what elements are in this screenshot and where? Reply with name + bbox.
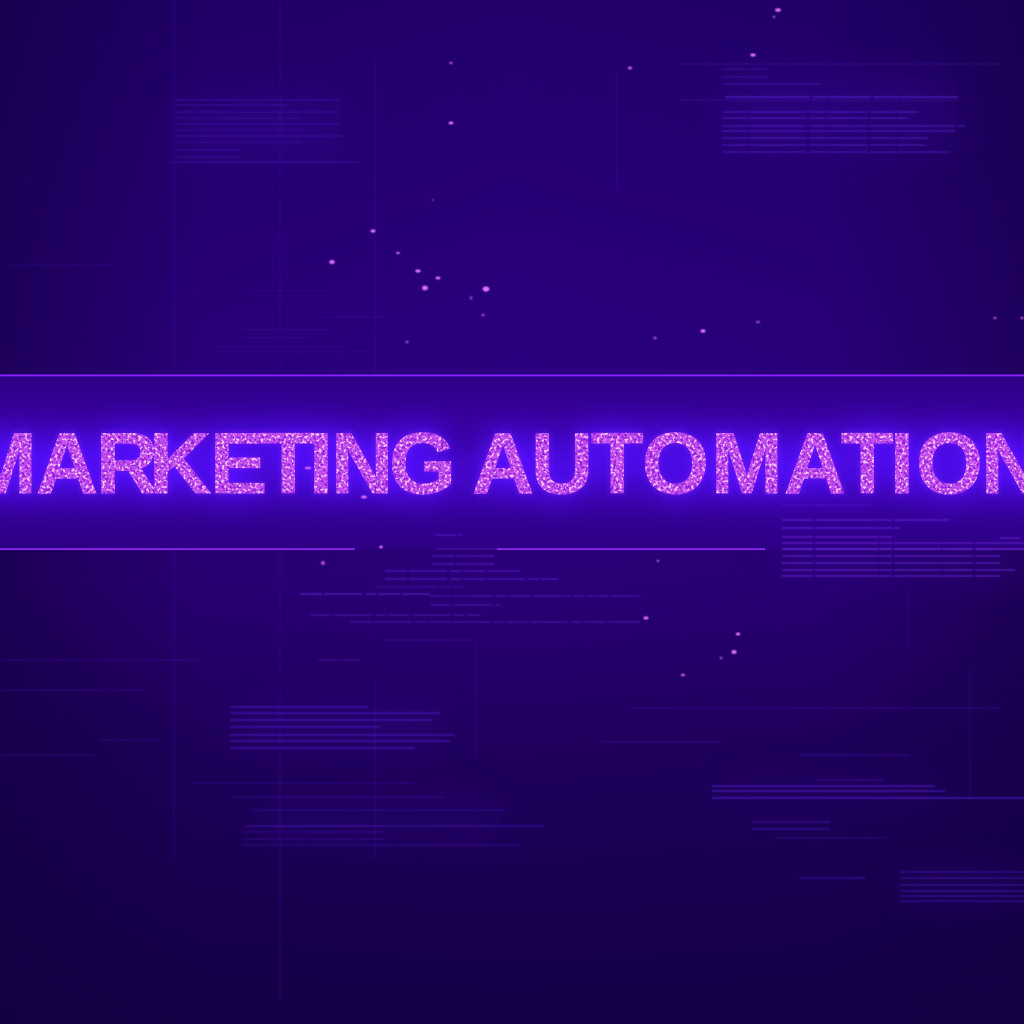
glowing particles <box>305 8 1024 676</box>
faint vertical grid lines <box>174 0 970 1000</box>
top accent line <box>0 374 1024 376</box>
data lines: lower left <box>0 660 545 845</box>
data lines: lower right <box>600 708 1024 901</box>
data lines: top left <box>10 100 390 352</box>
center band panel <box>0 376 1024 549</box>
bottom accent line <box>0 548 765 550</box>
data lines: right of center <box>782 505 1024 576</box>
data lines: center <box>300 535 640 660</box>
data lines: top right <box>680 64 1000 152</box>
soft glow patches behind data blocks <box>180 75 1024 900</box>
